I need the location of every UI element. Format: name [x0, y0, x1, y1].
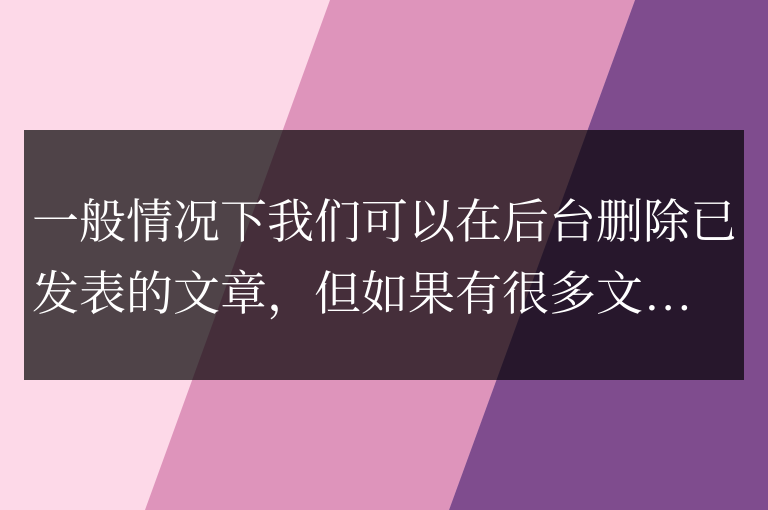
title line 1: 一般情况下我们可以在后台删除已 — [32, 197, 737, 249]
title line 2: 发表的文章，但如果有很多文... — [32, 269, 695, 321]
dark translucent title panel — [24, 130, 744, 380]
